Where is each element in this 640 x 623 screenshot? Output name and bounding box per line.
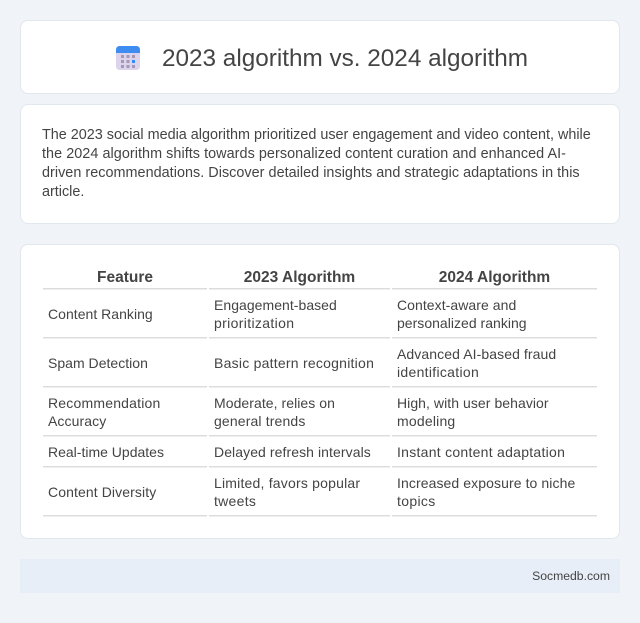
title: 2023 algorithm vs. 2024 algorithm bbox=[162, 45, 528, 72]
row: content diversity: topics bbox=[397, 493, 436, 509]
row: recommendation accuracy: Accuracy bbox=[48, 413, 106, 429]
row: recommendation accuracy: High, with user behavior bbox=[397, 395, 549, 411]
row: content ranking: Content Ranking bbox=[48, 306, 153, 322]
intro paragraph: article. bbox=[42, 184, 84, 200]
row: content ranking: personalized ranking bbox=[397, 315, 527, 331]
footer source label: Socmedb.com bbox=[532, 569, 610, 583]
row: content ranking: Context-aware and bbox=[397, 297, 516, 313]
row: real-time updates: Delayed refresh intervals bbox=[214, 444, 371, 460]
footer bar bbox=[20, 559, 620, 593]
icon: calendar bbox=[116, 46, 140, 70]
table header row: 2024 Algorithm bbox=[439, 269, 550, 286]
row: content ranking: prioritization bbox=[214, 315, 294, 331]
row: content diversity: Limited, favors popular bbox=[214, 475, 360, 491]
table header row: Feature bbox=[97, 269, 153, 286]
row: recommendation accuracy: general trends bbox=[214, 413, 305, 429]
row: real-time updates: Instant content adaptation bbox=[397, 444, 565, 460]
row: recommendation accuracy: Recommendation bbox=[48, 395, 161, 411]
intro paragraph: The 2023 social media algorithm prioritized user engagement and video content, while bbox=[42, 127, 591, 143]
panel: header bbox=[20, 20, 620, 94]
row: spam detection: identification bbox=[397, 364, 479, 380]
row: recommendation accuracy: modeling bbox=[397, 413, 455, 429]
panel: comparison table bbox=[20, 244, 620, 539]
row: content diversity: Content Diversity bbox=[48, 484, 156, 500]
intro paragraph: driven recommendations. Discover detailed insights and strategic adaptations in this bbox=[42, 165, 580, 181]
row: spam detection: Basic pattern recognition bbox=[214, 355, 374, 371]
row: spam detection: Advanced AI-based fraud bbox=[397, 346, 556, 362]
panel: intro text bbox=[20, 104, 620, 224]
intro paragraph: the 2024 algorithm shifts towards personalized content curation and enhanced AI- bbox=[42, 146, 566, 162]
intro paragraph bbox=[42, 127, 591, 200]
row: content diversity: Increased exposure to niche bbox=[397, 475, 575, 491]
row: content diversity: tweets bbox=[214, 493, 256, 509]
row: recommendation accuracy: Moderate, relies on bbox=[214, 395, 335, 411]
row: real-time updates: Real-time Updates bbox=[48, 444, 164, 460]
row: content ranking: Engagement-based bbox=[214, 297, 337, 313]
row: spam detection: Spam Detection bbox=[48, 355, 148, 371]
table header row: 2023 Algorithm bbox=[244, 269, 355, 286]
